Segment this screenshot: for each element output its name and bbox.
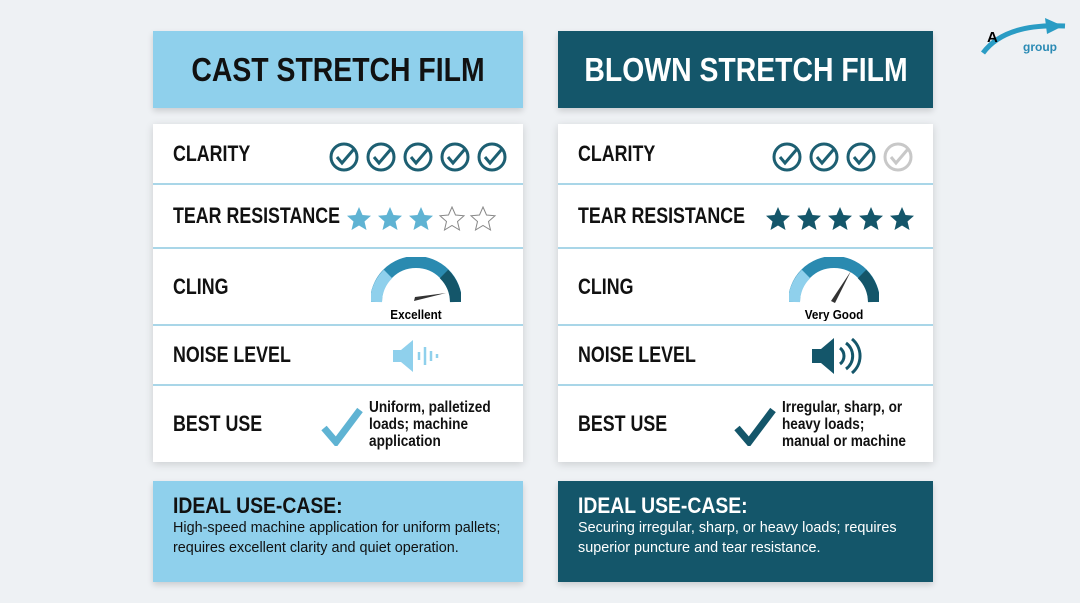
- row: cling: [153, 249, 523, 326]
- header: cast: CAST STRETCH FILM: [191, 50, 485, 88]
- callout: blown ideal: Securing irregular, sharp, or heavy loads; requires: [578, 519, 897, 536]
- panel: cast table: [153, 124, 523, 462]
- row: tear: [558, 185, 933, 249]
- header: cast: [153, 31, 523, 108]
- callout: blown ideal: IDEAL USE-CASE:: [578, 493, 748, 518]
- row: tear: [153, 185, 523, 249]
- callout: cast ideal: [153, 481, 523, 582]
- row: noise: [558, 326, 933, 386]
- row: tear: TEAR RESISTANCE: [173, 203, 340, 228]
- row: cling: CLING: [578, 274, 633, 298]
- row: clarity: [558, 124, 933, 185]
- row: best use: heavy loads;: [782, 416, 864, 433]
- callout: blown ideal: superior puncture and tear resistance.: [578, 539, 821, 556]
- row: noise: NOISE LEVEL: [173, 342, 291, 367]
- row: best use: [578, 399, 906, 450]
- row: clarity: CLARITY: [578, 140, 655, 166]
- callout: cast ideal: IDEAL USE-CASE:: [173, 493, 343, 518]
- row: best use: Uniform, palletized: [369, 399, 491, 416]
- callout: blown ideal: [558, 481, 933, 582]
- row: cling: CLING: [173, 274, 228, 298]
- header: blown: BLOWN STRETCH FILM: [584, 50, 907, 88]
- row: best use: [173, 399, 491, 450]
- row: best use: manual or machine: [782, 433, 906, 450]
- row: best use: Irregular, sharp, or: [782, 399, 902, 416]
- header: blown: [558, 31, 933, 108]
- panel: blown table: [558, 124, 933, 462]
- logo: A: [987, 29, 998, 46]
- row: best use: loads; machine: [369, 416, 468, 433]
- callout: cast ideal: requires excellent clarity and quiet operation.: [173, 539, 459, 556]
- logo: group: [1023, 40, 1057, 54]
- callout: cast ideal: High-speed machine application for uniform pallets;: [173, 519, 500, 536]
- row: noise: NOISE LEVEL: [578, 342, 696, 367]
- row: clarity: [153, 124, 523, 185]
- row: tear: TEAR RESISTANCE: [578, 203, 745, 228]
- row: noise: [153, 326, 523, 386]
- logo: [981, 18, 1066, 54]
- row: clarity: CLARITY: [173, 140, 250, 166]
- row: best use: BEST USE: [173, 411, 262, 436]
- row: best use: BEST USE: [578, 411, 667, 436]
- row: best use: application: [369, 433, 441, 450]
- row: cling: [558, 249, 933, 326]
